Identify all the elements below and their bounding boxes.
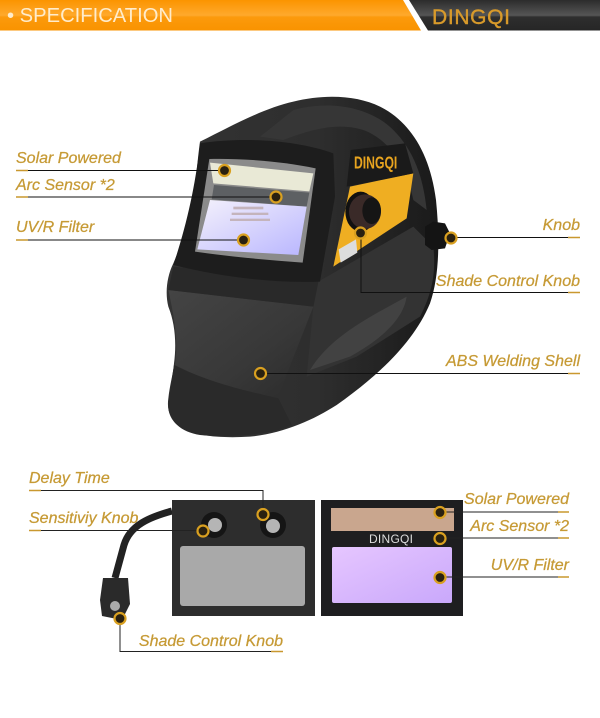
sensor strip [212,185,309,207]
label: Shade Control Knob lower: Shade Control Knob [139,633,283,650]
label: Sensitiviy Knob: Sensitiviy Knob [29,510,138,527]
label: Knob: Knob [543,217,580,234]
solar cartridge [321,500,463,616]
header banner [0,0,600,30]
cartridge body [172,500,315,616]
filter glass [197,200,307,255]
purple filter [332,547,452,603]
label: Solar Powered lower: Solar Powered [464,491,570,508]
remote control [100,578,130,620]
shade knob [345,192,381,232]
right dial [260,512,286,538]
label: Shade Control Knob: Shade Control Knob [436,273,580,290]
header title: • SPECIFICATION [7,5,173,27]
header logo: DINGQI [432,6,510,29]
callout markers [114,165,456,624]
label underline accents [16,170,580,374]
left dial [201,512,227,538]
label: Arc Sensor *2: Arc Sensor *2 [15,177,115,194]
side logo: DINGQI [354,152,397,172]
helmet photo [167,97,450,437]
label: Delay Time: Delay Time [29,470,110,487]
remote screw [110,601,120,611]
label: ABS Welding Shell: ABS Welding Shell [445,353,580,370]
cartridge body [321,500,463,616]
grey lens [180,546,305,606]
label: Arc Sensor lower: Arc Sensor *2 [469,518,569,535]
label: Solar Powered: Solar Powered [16,150,122,167]
control cartridge [100,500,315,620]
visor frame [173,140,335,282]
solar strip [331,508,454,531]
barcode label [339,239,357,263]
cable [115,511,172,578]
solar panel [210,163,313,191]
side sticker [333,173,413,267]
label: UV/R Filter: UV/R Filter [16,219,95,236]
leader lines: helmet [16,170,580,374]
visor window [195,159,316,263]
helmet chin [168,290,313,400]
side knob [425,222,450,250]
leader lines: lower [29,490,569,652]
label: UV/R Filter lower: UV/R Filter [491,557,570,574]
helmet shell [167,97,438,437]
cartridge logo: DINGQI [369,532,413,546]
header dark logo panel [409,0,600,30]
